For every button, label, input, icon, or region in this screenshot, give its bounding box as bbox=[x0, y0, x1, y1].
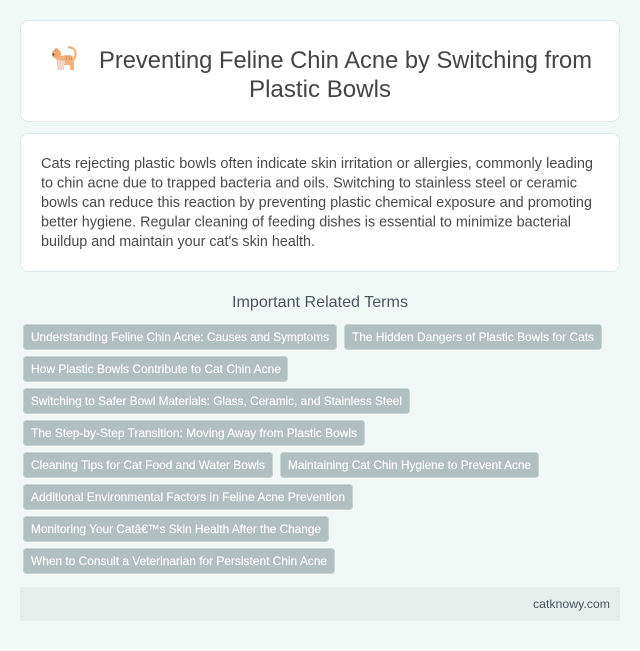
chip: safer materials: Switching to Safer Bowl Materials: Glass, Ceramic, and Stainless Steel bbox=[31, 394, 402, 408]
list: term chips bbox=[24, 324, 602, 574]
chip: understanding bbox=[24, 324, 336, 350]
text block: summary: Cats rejecting plastic bowls often indicate skin irritation or allergies, commonly leading bbox=[41, 156, 593, 172]
icon: cat bbox=[52, 47, 76, 70]
text block: summary: better hygiene. Regular cleaning of feeding dishes is essential to minimize bacterial bbox=[41, 214, 571, 230]
chip: transition bbox=[24, 420, 364, 446]
text block: summary bbox=[41, 156, 593, 250]
chip: hidden dangers: The Hidden Dangers of Plastic Bowls for Cats bbox=[352, 330, 594, 344]
chip: understanding: Understanding Feline Chin Acne: Causes and Symptoms bbox=[31, 330, 329, 344]
title: Preventing Feline Chin Acne by Switching from bbox=[99, 47, 592, 74]
chip: chin hygiene: Maintaining Cat Chin Hygiene to Prevent Acne bbox=[288, 458, 531, 472]
chip: cleaning tips bbox=[24, 452, 272, 478]
chip: monitoring bbox=[24, 516, 328, 542]
heading: related terms: Important Related Terms bbox=[232, 294, 408, 311]
text block: summary: bowls can reduce this reaction by preventing plastic chemical exposure and promoting bbox=[41, 195, 592, 211]
chip: monitoring: Monitoring Your Catâ€™s Skin Health After the Change bbox=[31, 522, 321, 536]
footer: catknowy.com bbox=[533, 597, 610, 611]
title: Plastic Bowls bbox=[249, 76, 391, 103]
panel: summary card bbox=[20, 134, 620, 272]
chip: chin hygiene bbox=[280, 452, 538, 478]
panel: title card bbox=[20, 20, 620, 122]
chip: veterinarian bbox=[24, 548, 334, 574]
text block: summary: to chin acne due to trapped bacteria and oils. Switching to stainless steel or ceramic bbox=[41, 176, 577, 192]
chip: cleaning tips: Cleaning Tips for Cat Food and Water Bowls bbox=[31, 458, 265, 472]
chip: how plastic contributes: How Plastic Bowls Contribute to Cat Chin Acne bbox=[31, 362, 281, 376]
chip: hidden dangers bbox=[344, 324, 602, 350]
chip: environmental factors bbox=[24, 484, 352, 510]
chip: how plastic contributes bbox=[24, 356, 288, 382]
chip: veterinarian: When to Consult a Veterinarian for Persistent Chin Acne bbox=[31, 554, 327, 568]
title bbox=[99, 47, 592, 103]
footer bbox=[20, 587, 620, 621]
chip: safer materials bbox=[24, 388, 410, 414]
chip: transition: The Step-by-Step Transition: Moving Away from Plastic Bowls bbox=[31, 426, 357, 440]
text block: summary: buildup and maintain your cat's skin health. bbox=[41, 234, 315, 250]
chip: environmental factors: Additional Environmental Factors in Feline Acne Prevention bbox=[31, 490, 345, 504]
